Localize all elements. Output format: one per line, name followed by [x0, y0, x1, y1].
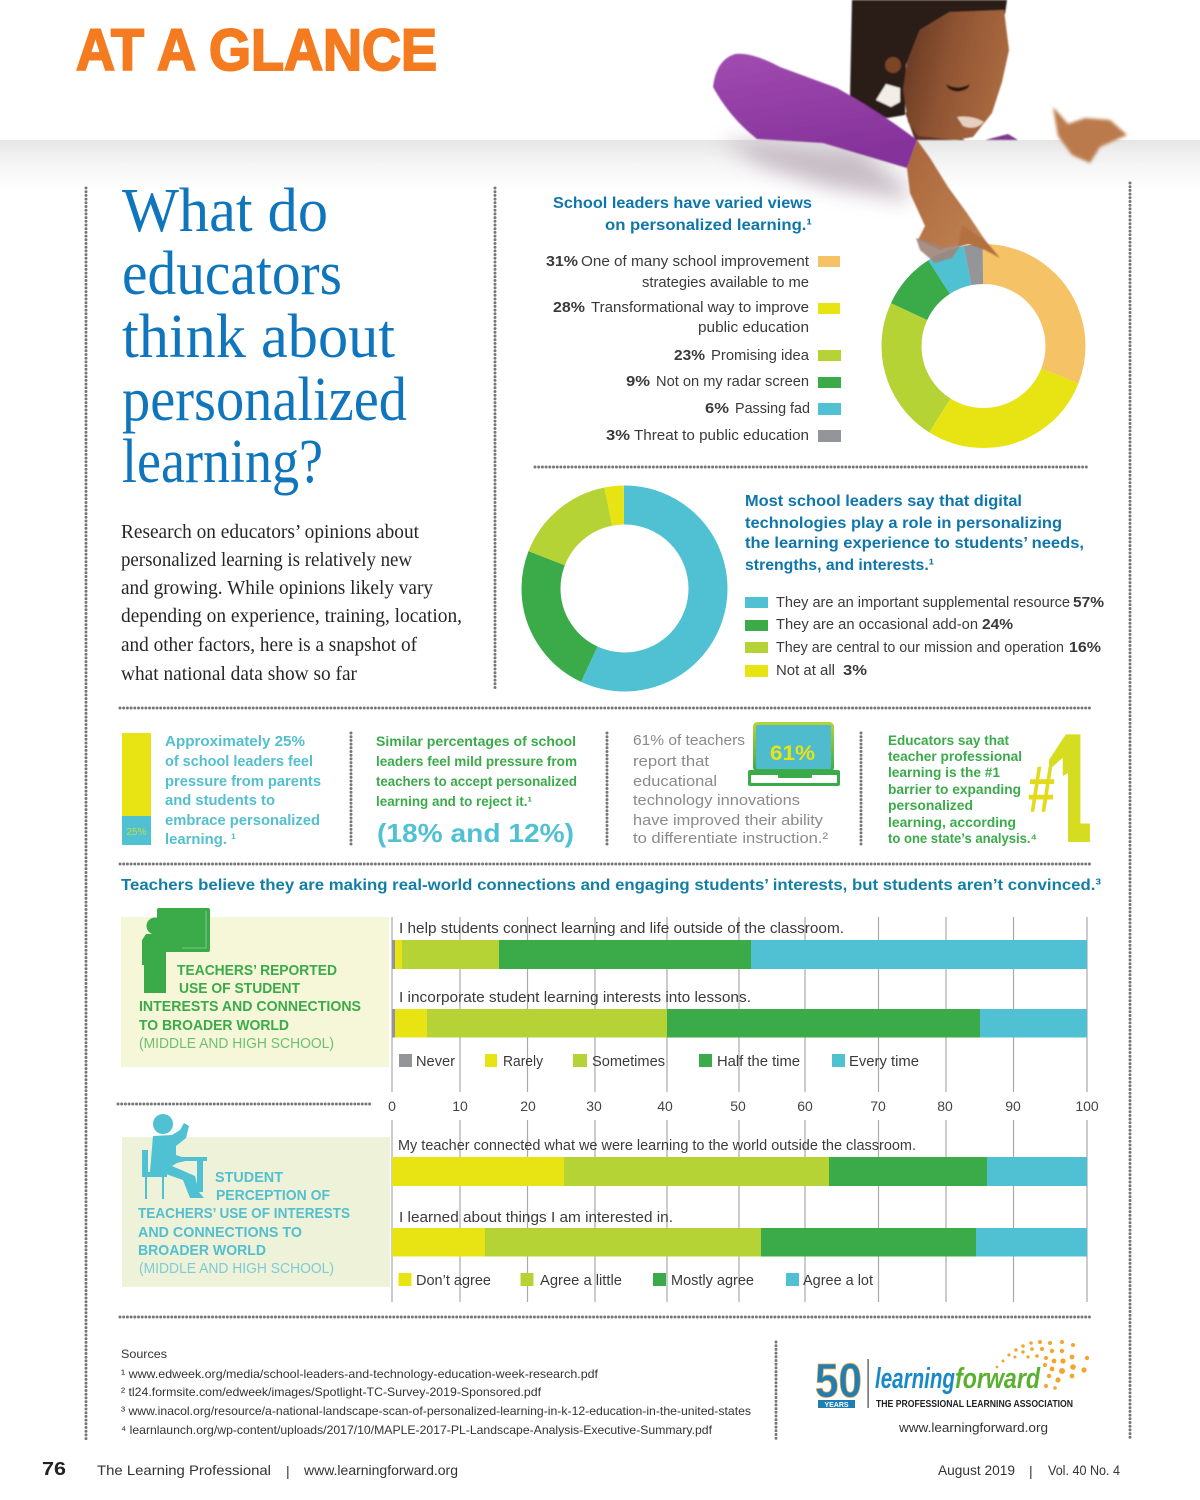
logo: website: www.learningforward.org [898, 1420, 1048, 1435]
legend: views: 9% [626, 373, 650, 390]
stat: 61% of teachers: report that [633, 753, 710, 770]
dotted frame lines [86, 183, 1130, 1440]
icon: big #1: # [1028, 752, 1055, 826]
legend: student responses: Agree a little [540, 1272, 622, 1289]
stat: 61% of teachers: to differentiate instruction.² [633, 830, 828, 847]
stat: number one barrier: personalized [888, 797, 973, 813]
footer: www.learningforward.org [303, 1462, 458, 1478]
stat: number one barrier: to one state’s analysis.⁴ [888, 830, 1037, 846]
heading: What do [122, 177, 328, 245]
legend: digital technologies: 24% [982, 616, 1013, 633]
legend: views: One of many school improvement [581, 253, 810, 270]
legend: teacher responses [399, 1053, 919, 1070]
stat: 25% pressure: learning. ¹ [165, 831, 236, 848]
heading: digital technologies: Most school leaders say that digital [745, 493, 1022, 510]
stat: 61% of teachers: have improved their ability [633, 812, 824, 829]
legend: teacher responses: Never [416, 1053, 455, 1070]
stat: number one barrier [888, 734, 1090, 846]
panel: digital technologies [541, 493, 1104, 679]
axis labels: 50 [730, 1098, 746, 1114]
photo: student pointing at the chart [713, 0, 1127, 250]
stat: 61% of teachers [633, 724, 840, 847]
gridlines [392, 917, 1087, 1302]
title: at a glance: AT A GLANCE [76, 18, 437, 83]
sources: ³ www.inacol.org/resource/a-national-landscape-scan-of-personalized-learning-in-k-12-education-in-the-united-states [121, 1404, 751, 1418]
stat: 18% and 12%: learning and to reject it.¹ [376, 793, 532, 809]
sources: ⁴ learnlaunch.org/wp-content/uploads/2017/10/MAPLE-2017-PL-Landscape-Analysis-Executive-Summary.pdf [121, 1423, 713, 1437]
legend: digital technologies: 16% [1069, 639, 1101, 656]
stat: 18% and 12%: leaders feel mild pressure from [376, 753, 577, 769]
heading: varied views: on personalized learning.¹ [605, 217, 812, 234]
stat: 61% of teachers: educational [633, 773, 717, 790]
legend: student responses [398, 1272, 874, 1289]
donut chart: digital technologies [541, 505, 708, 672]
bar: incorporate interests: I incorporate student learning interests into lessons. [399, 989, 751, 1006]
axis labels: 100 [1075, 1098, 1099, 1114]
stat: 18% and 12%: teachers to accept personalized [376, 773, 577, 789]
intro text: Research on educators’ opinions about [121, 521, 419, 543]
stat: 25% pressure: embrace personalized [165, 812, 320, 829]
stat: 18% and 12%: Similar percentages of school [376, 733, 576, 749]
label text: USE OF STUDENT [179, 980, 300, 997]
axis labels: 20 [520, 1098, 536, 1114]
heading: personalized [122, 366, 407, 434]
heading: learning? [122, 428, 323, 496]
legend: student responses: Agree a lot [803, 1272, 874, 1289]
logo: wordmark: learning [875, 1363, 955, 1395]
label text: (MIDDLE AND HIGH SCHOOL) [139, 1035, 334, 1052]
heading [122, 177, 407, 496]
stat: number one barrier: teacher professional [888, 748, 1022, 764]
stat: 18% and 12% [376, 733, 577, 848]
panel: teachers reported label [121, 908, 389, 1067]
intro text: and growing. While opinions likely vary [121, 577, 433, 599]
legend: digital technologies [745, 594, 1104, 679]
heading: educators [122, 240, 342, 308]
legend: views: Not on my radar screen [656, 373, 809, 390]
sources: Sources [121, 1347, 167, 1361]
heading: digital technologies [745, 493, 1084, 574]
legend: views: 23% [674, 347, 705, 364]
legend: views: strategies available to me [642, 274, 809, 291]
heading: varied views [553, 195, 812, 234]
stat: 25% pressure [122, 733, 321, 848]
icon: big #1 [1028, 734, 1090, 842]
stat: number one barrier: barrier to expanding [888, 781, 1021, 797]
stat: 61% of teachers: technology innovations [633, 792, 800, 809]
legend: views: 31% [546, 253, 578, 270]
intro text [121, 521, 462, 685]
label text: STUDENT [215, 1169, 283, 1186]
bar: help students connect: I help students connect learning and life outside of the classroom. [399, 920, 844, 937]
footer: August 2019 [938, 1462, 1015, 1478]
icon: student at desk [142, 1114, 207, 1199]
label text: TEACHERS’ USE OF INTERESTS [138, 1205, 350, 1222]
legend: views: Passing fad [735, 400, 810, 417]
stat: 25% pressure: pressure from parents [165, 773, 321, 790]
bar: help students connect [392, 920, 1087, 969]
label text: BROADER WORLD [138, 1242, 266, 1259]
logo: wordmark: forward [955, 1363, 1041, 1395]
label text [138, 1169, 350, 1277]
footer: Vol. 40 No. 4 [1048, 1462, 1120, 1478]
stat: 25% pressure: Approximately 25% [165, 733, 305, 750]
bar: teacher connected [392, 1137, 1087, 1186]
sources [121, 1347, 751, 1437]
bar: learned about interests: I learned about things I am interested in. [399, 1209, 673, 1226]
bar: incorporate interests [392, 989, 1087, 1038]
donut chart: views [902, 264, 1066, 428]
bar: teacher connected: My teacher connected what we were learning to the world outside the classroom. [398, 1137, 916, 1154]
label text: TO BROADER WORLD [139, 1017, 289, 1034]
background band [0, 140, 1200, 192]
axis labels: 80 [937, 1098, 953, 1114]
legend: digital technologies: They are central to our mission and operation [776, 639, 1064, 656]
footer: | [286, 1463, 290, 1479]
legend: teacher responses: Half the time [717, 1053, 800, 1070]
heading: varied views: School leaders have varied views [553, 195, 812, 212]
legend: teacher responses: Rarely [503, 1053, 543, 1070]
sources: ¹ www.edweek.org/media/school-leaders-and-technology-education-week-research.pdf [121, 1367, 599, 1381]
legend: views: public education [698, 319, 809, 336]
legend: digital technologies: They are an important supplemental resource [776, 594, 1070, 611]
label text: (MIDDLE AND HIGH SCHOOL) [139, 1260, 334, 1277]
footer: The Learning Professional [97, 1462, 271, 1478]
label text: INTERESTS AND CONNECTIONS [139, 998, 361, 1015]
label text: PERCEPTION OF [216, 1187, 330, 1204]
legend: digital technologies: Not at all [776, 662, 835, 679]
stat: 61% of teachers: 61% of teachers [633, 732, 745, 749]
legend: views: Transformational way to improve [591, 299, 809, 316]
icon: pointing fingertip over chart [916, 225, 1000, 263]
icon: big #1: 1 [1039, 704, 1099, 874]
label text: TEACHERS’ REPORTED [177, 962, 337, 979]
footer [42, 1459, 1120, 1479]
label text [139, 962, 361, 1052]
intro text: personalized learning is relatively new [121, 549, 413, 571]
legend: student responses: Don’t agree [416, 1272, 491, 1289]
axis labels: 90 [1005, 1098, 1021, 1114]
legend: teacher responses: Sometimes [592, 1053, 665, 1070]
heading: teachers believe: Teachers believe they are making real-world connections and engaging students’ interests, but students aren’t convinced.³ [121, 877, 1101, 894]
axis labels: 30 [586, 1098, 602, 1114]
label text: AND CONNECTIONS TO [138, 1224, 302, 1241]
stat: number one barrier: learning is the #1 [888, 764, 1000, 780]
heading: think about [122, 303, 395, 371]
legend: views: Threat to public education [634, 427, 809, 444]
icon: teacher at board [142, 908, 210, 993]
stat: 25% pressure: of school leaders feel [165, 753, 313, 770]
legend: views: 6% [705, 400, 729, 417]
logo: wordmark: THE PROFESSIONAL LEARNING ASSOCIATION [876, 1398, 1073, 1410]
axis labels: 40 [657, 1098, 673, 1114]
stat: 18% and 12%: (18% and 12%) [377, 818, 574, 848]
panel: student perception label [122, 1114, 390, 1287]
sources: ² tl24.formsite.com/edweek/images/Spotlight-TC-Survey-2019-Sponsored.pdf [121, 1385, 542, 1399]
axis labels: 60 [797, 1098, 813, 1114]
logo: orange dot swoosh [996, 1340, 1089, 1390]
legend: views: Promising idea [711, 347, 810, 364]
legend: digital technologies: 3% [843, 662, 867, 679]
legend: digital technologies: 57% [1073, 594, 1104, 611]
legend: views: 3% [606, 427, 630, 444]
bar: learned about interests [392, 1209, 1087, 1256]
bar: 25 percent: 25% [126, 827, 147, 838]
axis labels: 10 [452, 1098, 468, 1114]
intro text: and other factors, here is a snapshot of [121, 634, 417, 656]
stat: number one barrier: Educators say that [888, 732, 1009, 748]
legend: digital technologies: They are an occasional add-on [776, 616, 978, 633]
heading: digital technologies: technologies play a role in personalizing [745, 515, 1062, 532]
stat: 25% pressure: and students to [165, 792, 275, 809]
bar: 25 percent [122, 733, 151, 845]
legend: student responses: Mostly agree [671, 1272, 754, 1289]
stat: number one barrier: learning, according [888, 814, 1016, 830]
intro text: what national data show so far [121, 663, 357, 685]
legend: views: 28% [553, 299, 585, 316]
footer: 76 [42, 1459, 66, 1479]
logo: learning forward [815, 1340, 1089, 1435]
heading: digital technologies: the learning experience to students’ needs, [745, 535, 1084, 552]
axis labels [388, 1098, 1099, 1114]
legend: views [546, 253, 841, 444]
panel: school leaders views [546, 195, 1066, 444]
footer: | [1029, 1463, 1033, 1479]
logo: 50 years: 50 [815, 1355, 862, 1408]
intro text: depending on experience, training, location, [121, 605, 462, 627]
axis labels: 70 [870, 1098, 886, 1114]
logo: 50 years: YEARS [824, 1402, 849, 1409]
axis labels: 0 [388, 1098, 396, 1114]
icon: laptop with 61% [748, 724, 840, 786]
icon: laptop with 61%: 61% [770, 742, 815, 765]
logo: wordmark [875, 1363, 1073, 1410]
legend: teacher responses: Every time [849, 1053, 919, 1070]
stacked bar chart [388, 917, 1099, 1302]
heading: digital technologies: strengths, and interests.¹ [745, 557, 934, 574]
